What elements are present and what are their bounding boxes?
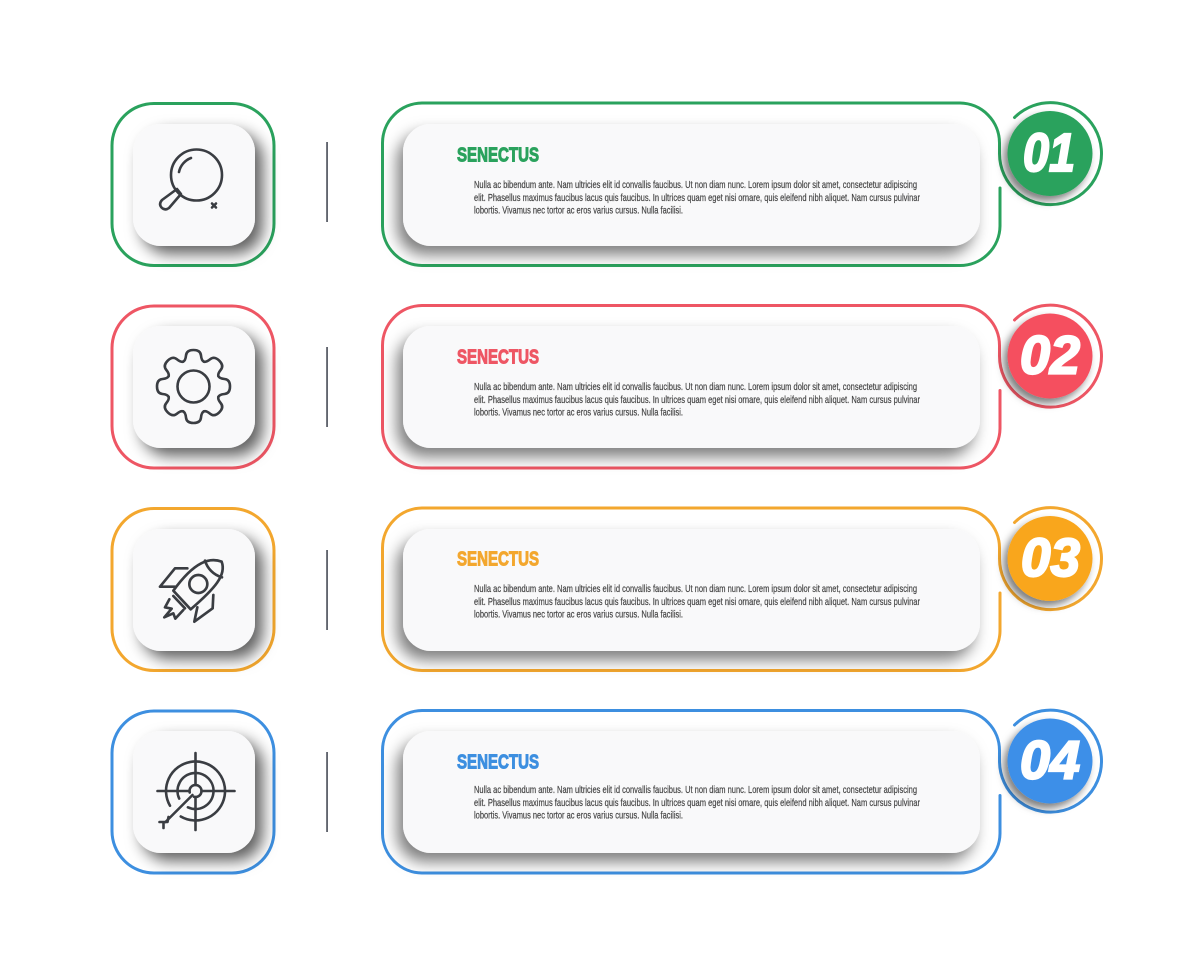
body text [474, 381, 920, 418]
icon outline: red [112, 306, 274, 468]
heading: SENECTUS [457, 346, 539, 368]
text panel outline and number ring [382, 103, 1101, 266]
body text: Nulla ac bibendum ante. Nam ultricies elit id convallis faucibus. Ut non diam nunc. Lorem ipsum dolor sit amet, consectetur adipiscing [474, 381, 917, 393]
number badge 04: 04 [1020, 730, 1080, 790]
icon outline: blue [112, 711, 274, 873]
text panel [403, 529, 980, 651]
body text [474, 784, 920, 822]
heading: SENECTUS [457, 548, 539, 570]
body text [474, 179, 920, 216]
text panel [403, 326, 980, 448]
number badge 04 [1008, 718, 1092, 804]
body text: elit. Phasellus maximus faucibus lacus quis faucibus. In ultrices quam eget nisi ornare, quis eleifend nibh aliquet. Nam cursus pulvinar [474, 192, 920, 204]
text panel outline and number ring [382, 710, 1101, 873]
body text: lobortis. Vivamus nec tortor ac eros varius cursus. Nulla facilisi. [474, 810, 683, 822]
body text: Nulla ac bibendum ante. Nam ultricies elit id convallis faucibus. Ut non diam nunc. Lorem ipsum dolor sit amet, consectetur adipiscing [474, 583, 917, 595]
body text: elit. Phasellus maximus faucibus lacus quis faucibus. In ultrices quam eget nisi ornare, quis eleifend nibh aliquet. Nam cursus pulvinar [474, 596, 920, 608]
heading: SENECTUS [457, 144, 539, 166]
icon tile [133, 124, 255, 246]
number badge 03 [1008, 516, 1092, 601]
text panel outline and number ring [382, 305, 1101, 468]
icon: target with arrow [158, 753, 234, 830]
body text [474, 583, 920, 620]
divider [326, 347, 328, 427]
row 2: settings [112, 305, 1101, 468]
divider [326, 752, 328, 832]
body text: lobortis. Vivamus nec tortor ac eros varius cursus. Nulla facilisi. [474, 204, 683, 216]
number badge 02: 02 [1020, 326, 1080, 386]
body text: Nulla ac bibendum ante. Nam ultricies elit id convallis faucibus. Ut non diam nunc. Lorem ipsum dolor sit amet, consectetur adipiscing [474, 179, 917, 191]
divider [326, 142, 328, 222]
number badge 02 [1008, 314, 1092, 398]
text panel [403, 731, 980, 853]
icon: gear [157, 350, 230, 423]
icon outline: orange [112, 508, 274, 670]
number badge 03: 03 [1021, 528, 1080, 588]
body text: Nulla ac bibendum ante. Nam ultricies elit id convallis faucibus. Ut non diam nunc. Lorem ipsum dolor sit amet, consectetur adipiscing [474, 784, 917, 796]
icon tile [133, 731, 255, 853]
icon: rocket [160, 560, 223, 622]
body text: elit. Phasellus maximus faucibus lacus quis faucibus. In ultrices quam eget nisi ornare, quis eleifend nibh aliquet. Nam cursus pulvinar [474, 797, 920, 809]
body text: lobortis. Vivamus nec tortor ac eros varius cursus. Nulla facilisi. [474, 608, 683, 620]
heading: SENECTUS [457, 752, 539, 774]
icon: magnifying glass [160, 150, 222, 209]
body text: lobortis. Vivamus nec tortor ac eros varius cursus. Nulla facilisi. [474, 406, 683, 418]
number badge 01 [1008, 111, 1092, 196]
icon tile [133, 326, 255, 448]
text panel [403, 124, 980, 246]
body text: elit. Phasellus maximus faucibus lacus quis faucibus. In ultrices quam eget nisi ornare, quis eleifend nibh aliquet. Nam cursus pulvinar [474, 394, 920, 406]
icon outline: green [112, 104, 274, 266]
text panel outline and number ring [382, 508, 1101, 670]
row 4: target [112, 710, 1101, 873]
icon tile [133, 529, 255, 651]
divider [326, 550, 328, 630]
row 3: launch [112, 508, 1101, 670]
row 1: search [112, 103, 1101, 266]
number badge 01: 01 [1023, 123, 1075, 183]
